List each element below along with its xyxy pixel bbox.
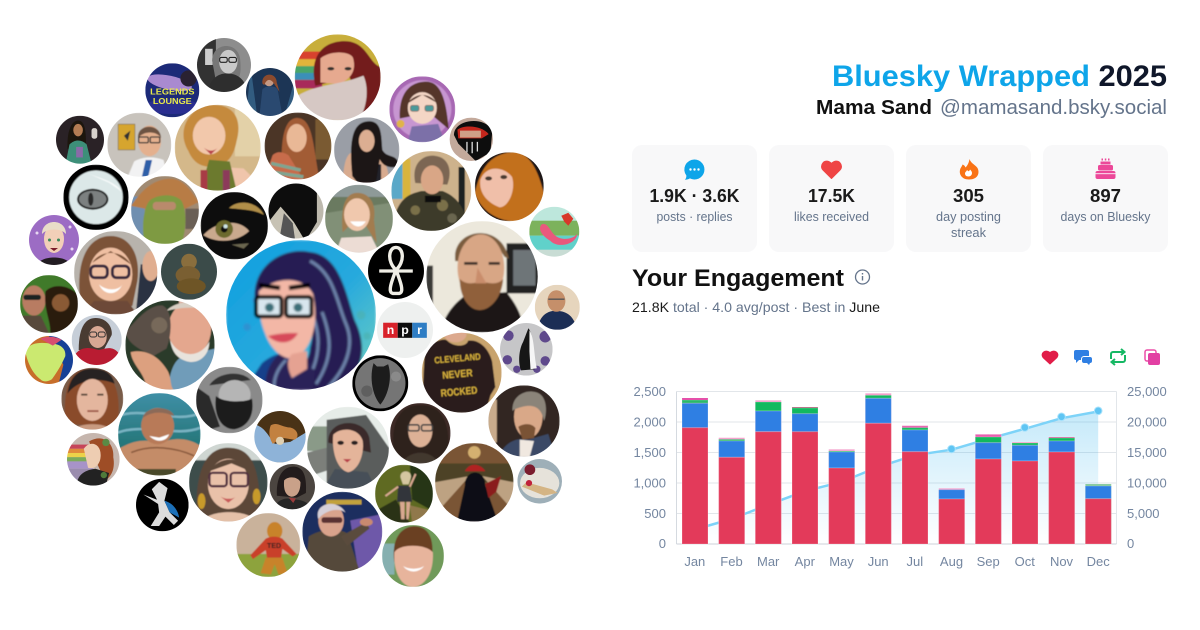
avatar: TED cartoon: TED	[267, 543, 281, 550]
bar: Oct	[1012, 442, 1038, 544]
month labels: Dec	[1087, 554, 1110, 569]
right axis labels: 15,000	[1127, 445, 1167, 460]
icon: likes	[1042, 351, 1058, 364]
avatar: Cleveland Never Rocked shirt	[422, 326, 502, 413]
avatar: dessert plate	[517, 459, 562, 504]
avatar: Legends Lounge: LOUNGE	[153, 97, 192, 106]
avatar: lavender wreath penguin	[500, 323, 553, 376]
cumulative line	[695, 412, 1098, 530]
title: Bluesky Wrapped 2025	[832, 60, 1167, 93]
avatar: purple cartoon woman	[29, 215, 79, 265]
avatar: bearded man black and white	[196, 367, 263, 433]
avatar: cat eye with black ring	[63, 165, 129, 230]
avatar: bald man with glasses	[535, 285, 580, 330]
display name: Mama Sand	[816, 97, 932, 119]
icon: heart	[822, 161, 841, 178]
heading: Your Engagement: Your Engagement	[632, 265, 844, 292]
month labels: Apr	[795, 554, 816, 569]
left axis labels: 500	[644, 506, 666, 521]
avatar: woman in forest	[375, 465, 433, 523]
bar: Apr	[792, 407, 818, 544]
value: 897	[1090, 186, 1121, 206]
avatar: black with fossil	[268, 184, 324, 238]
value: 17.5K	[808, 186, 855, 206]
avatar: woman with red scarf	[72, 315, 122, 365]
stacked bars	[682, 393, 1111, 544]
grid lines	[676, 392, 1116, 544]
avatar: main illustrated portrait	[226, 240, 376, 390]
avatar: Legends Lounge: LEGENDS	[150, 88, 195, 97]
icon: replies	[1074, 350, 1092, 365]
stat card: streak	[906, 145, 1031, 252]
avatar: woman with dog	[20, 275, 78, 333]
avatar: TED cartoon	[236, 513, 300, 577]
bar: Mar	[755, 400, 781, 544]
left axis labels: 0	[659, 536, 666, 551]
avatar: laughing woman	[325, 185, 393, 253]
icon: cake	[1096, 158, 1116, 179]
avatar: man pointing	[302, 492, 382, 572]
stat card: days on Bluesky	[1043, 145, 1168, 252]
cumulative area	[695, 412, 1098, 544]
avatar: woman with teal dress	[56, 116, 104, 164]
avatar: woman in sequin shawl	[391, 151, 471, 231]
avatar: dog in blue blanket	[254, 411, 306, 462]
label line 2: streak	[951, 225, 986, 240]
label: days on Bluesky	[1060, 209, 1151, 224]
left axis labels: 2,500	[633, 384, 666, 399]
avatar: NPR logo: r	[417, 323, 422, 337]
icon: quotes	[1145, 350, 1160, 365]
avatar: man in black red mask	[450, 118, 493, 161]
avatar: long red hair	[264, 112, 332, 180]
label: likes received	[794, 209, 869, 224]
avatar: blonde curly hair	[175, 105, 261, 191]
value: 305	[953, 186, 984, 206]
bar: Aug	[939, 488, 965, 544]
avatar: curly hair with glasses	[390, 403, 451, 464]
avatar: bearded man in jacket	[426, 221, 542, 332]
avatar: grey moon with figure	[352, 355, 408, 411]
handle: @mamasand.bsky.social	[940, 97, 1167, 119]
avatar: NPR logo	[377, 302, 433, 358]
avatar: Legends Lounge	[145, 63, 199, 117]
icon: flame	[960, 159, 978, 180]
avatar: woman with rainbow glasses	[74, 231, 159, 314]
avatar: knitted tentacle mask	[131, 176, 199, 244]
left axis labels: 2,000	[633, 414, 666, 430]
avatar: bronze statue	[161, 244, 217, 300]
right axis labels: 0	[1127, 536, 1134, 551]
avatar: close-up eye with gold	[201, 192, 268, 259]
avatar: purple anime girl	[389, 76, 455, 142]
left axis labels: 1,000	[633, 476, 666, 490]
avatar: NPR logo: n	[387, 323, 394, 337]
avatar: man swimming	[118, 393, 201, 476]
left axis labels: 1,500	[633, 445, 666, 460]
month labels	[684, 554, 1110, 569]
stat card: posts and replies	[632, 145, 757, 252]
avatar: dark-haired woman grey backdrop	[334, 117, 399, 183]
avatar: salamander	[529, 207, 579, 257]
avatar: ginger long hair	[475, 152, 544, 221]
avatar: white lizard on black	[136, 479, 189, 531]
avatar: Cleveland Never Rocked shirt: NEVER	[442, 368, 474, 382]
chart: monthly engagement	[633, 384, 1167, 569]
avatar: woman with purple glasses	[189, 443, 268, 522]
right axis labels	[1127, 384, 1167, 551]
right axis labels: 10,000	[1127, 476, 1167, 490]
month labels: Jan	[684, 554, 705, 569]
value: 1.9K · 3.6K	[650, 186, 740, 206]
month labels: Sep	[977, 554, 1000, 569]
right axis labels: 25,000	[1127, 384, 1167, 399]
avatar: smiling woman	[382, 525, 444, 587]
avatar: black and white portrait	[197, 38, 251, 92]
month labels: Jul	[906, 554, 923, 569]
month labels: Jun	[868, 554, 889, 569]
avatar: grey-haired man with plaid shirt	[488, 385, 560, 457]
month labels: Feb	[720, 554, 743, 569]
engagement summary: 21.8K total · 4.0 avg/post · Best in June	[632, 299, 880, 315]
chart legend	[1042, 349, 1160, 365]
bar: Jan	[682, 398, 708, 544]
avatar: red hair with pillow	[295, 34, 381, 120]
avatar: man with tie and poster	[107, 113, 171, 177]
avatar: auburn hair woman	[61, 368, 123, 430]
bar: Jun	[865, 393, 891, 544]
avatar: ankh symbol	[368, 243, 424, 299]
month labels: Mar	[757, 554, 780, 569]
avatar: Cleveland Never Rocked shirt: ROCKED	[440, 385, 478, 400]
line points	[948, 407, 1102, 453]
month labels: May	[829, 554, 854, 569]
avatar: dark hair portrait	[270, 464, 315, 509]
month labels: Oct	[1015, 554, 1035, 569]
left axis labels	[633, 384, 666, 551]
right axis labels: 5,000	[1127, 506, 1160, 521]
right axis labels: 20,000	[1127, 414, 1167, 430]
avatar: woman in car	[307, 407, 389, 489]
avatar: luna moth	[25, 336, 73, 384]
bar: May	[829, 449, 855, 544]
avatar: cat and older man	[125, 300, 215, 390]
label: day posting	[936, 209, 1001, 224]
icon: info	[856, 270, 870, 284]
bar: Nov	[1049, 437, 1075, 544]
stat card: likes	[769, 145, 894, 252]
avatar: Cleveland Never Rocked shirt: CLEVELAND	[434, 351, 481, 366]
bar: Sep	[975, 434, 1001, 544]
month labels: Aug	[940, 554, 963, 569]
avatar bubble cluster	[20, 34, 580, 587]
bar: Dec	[1085, 484, 1111, 544]
bar: Feb	[719, 438, 745, 544]
icon: speech bubble	[684, 159, 704, 180]
avatar: dark blue character	[246, 68, 294, 116]
month labels: Nov	[1050, 554, 1074, 569]
icon: reposts	[1111, 349, 1125, 365]
label: posts · replies	[656, 209, 733, 224]
bar: Jul	[902, 426, 928, 544]
avatar: Darth Vader in a hall	[435, 443, 514, 522]
avatar: NPR logo: p	[401, 323, 409, 337]
avatar: rainbow ivy woman	[67, 433, 120, 486]
